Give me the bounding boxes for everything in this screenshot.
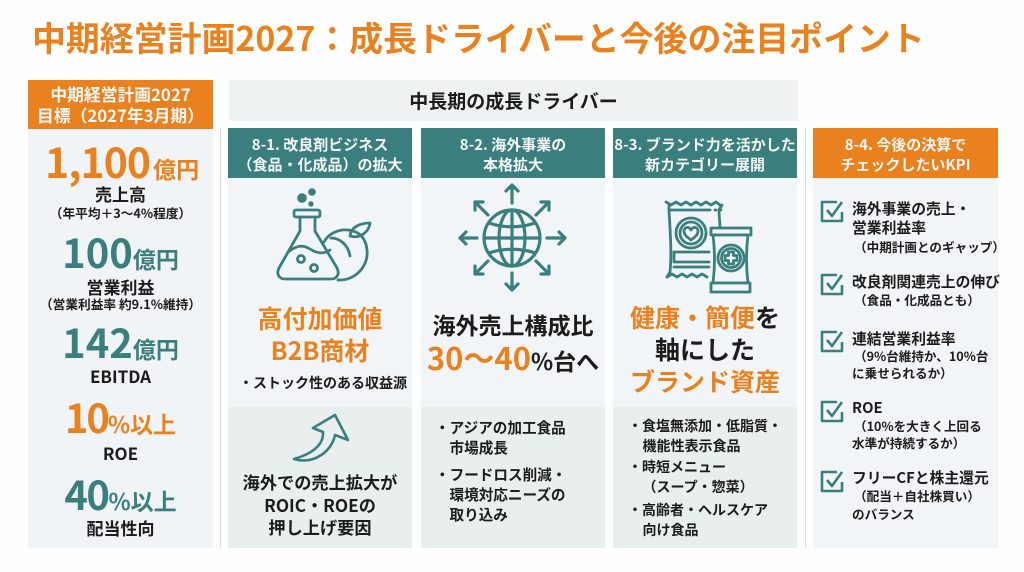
KPI item 1 — [820, 198, 1005, 256]
metric: operating profit — [40, 222, 201, 313]
KPI item 2 — [820, 271, 1000, 309]
panel: 8-2 overseas — [421, 128, 605, 548]
icon: growth arrow — [292, 414, 350, 462]
8-2 bullet 2: 環境対応ニーズの — [450, 484, 566, 505]
8-1 headline: 高付加価値 — [257, 300, 382, 336]
8-1 bullet: ・ストック性のある収益源 — [239, 373, 407, 393]
8-2 headline: 海外売上構成比 — [432, 307, 594, 341]
8-2 header — [421, 128, 605, 178]
8-3 bullet 3: ・高齢者・ヘルスケア — [628, 500, 768, 520]
operating profit value: 100億円 — [62, 222, 179, 280]
icon: checkbox — [820, 274, 844, 296]
KPI text 2: （食品・化成品とも） — [854, 290, 980, 309]
KPI text 4 — [852, 397, 982, 452]
8-4 header — [813, 128, 998, 178]
title: 中期経営計画2027：成長ドライバーと今後の注目ポイント — [32, 12, 925, 61]
metric: sales — [45, 130, 199, 222]
panel: mid-term targets — [28, 80, 213, 548]
8-4 header: チェックしたいKPI — [840, 154, 971, 175]
panel: 8-3 brand — [613, 128, 797, 548]
8-3 header: 新カテゴリー展開 — [645, 154, 765, 175]
8-3 bullet 2: ・時短メニュー — [628, 457, 726, 477]
8-3 bullet 1 — [628, 416, 782, 456]
8-1 headline: B2B商材 — [271, 332, 369, 368]
KPI text 1 — [852, 198, 1005, 256]
8-2 bullet 1 — [435, 417, 566, 458]
KPI item 3 — [820, 328, 988, 382]
KPI text 4: 水準が持続するか） — [852, 433, 965, 452]
8-1 lower box — [228, 407, 412, 548]
KPI text 5: のバランス — [852, 504, 915, 523]
icon: checkbox — [820, 200, 844, 222]
KPI text 1: （中期計画とのギャップ） — [854, 236, 1005, 256]
payout label: 配当性向 — [86, 515, 154, 540]
8-1 header: 8-1. 改良剤ビジネス — [252, 134, 388, 155]
8-1 lower text: ROIC・ROEの — [264, 492, 376, 516]
8-2 bullet 1: 市場成長 — [450, 437, 508, 458]
divider left — [220, 128, 221, 548]
ROE value: 10%以上 — [65, 387, 176, 445]
targets header — [28, 80, 213, 129]
payout value: 40%以上 — [64, 464, 177, 522]
8-2 lower box — [421, 407, 605, 548]
8-3 bullet 2 — [628, 457, 754, 496]
8-3 bullet 3 — [628, 500, 768, 540]
icon: checkbox — [820, 330, 844, 352]
8-1 lower text: 海外での売上拡大が — [243, 469, 397, 494]
KPI item 4 — [820, 397, 982, 452]
KPI text 4: （10%を大きく上回る — [854, 416, 982, 434]
8-1 header: （食品・化成品）の拡大 — [237, 154, 402, 175]
panel: 8-1 improver business — [228, 128, 412, 548]
sales label: 売上高 — [95, 181, 146, 206]
icon: checkbox — [820, 470, 844, 492]
KPI text 2 — [852, 271, 1000, 309]
KPI item 5 — [820, 467, 989, 523]
icon: globe with arrows — [458, 183, 567, 292]
KPI text 3: に乗せられるか） — [852, 362, 953, 382]
8-1 lower text — [243, 469, 397, 539]
8-1 headline — [257, 300, 382, 368]
8-3 bullet 2: （スープ・惣菜） — [642, 476, 754, 496]
8-4 header: 8-4. 今後の決算で — [845, 134, 966, 155]
targets header: 中期経営計画2027 — [50, 82, 191, 106]
KPI text 5: （配当＋自社株買い） — [854, 486, 980, 505]
metric: payout ratio — [64, 464, 177, 540]
icon: food packages — [664, 200, 752, 294]
divider right — [805, 128, 806, 548]
EBITDA value: 142億円 — [62, 312, 179, 370]
KPI text 3 — [852, 328, 988, 382]
8-2 bullet 2: ・フードロス削減・ — [435, 464, 566, 485]
KPI text 4: ROE — [852, 397, 883, 418]
8-2 header: 8-2. 海外事業の — [460, 134, 566, 155]
sales note: （年平均＋3〜4%程度） — [50, 203, 191, 222]
KPI text 3: 連結営業利益率 — [852, 328, 956, 348]
8-3 header: 8-3. ブランド力を活かした — [614, 134, 796, 155]
KPI text 2: 改良剤関連売上の伸び — [852, 271, 1000, 292]
KPI text 3: （9%台維持か、10%台 — [854, 346, 988, 364]
8-3 bullet 3: 向け食品 — [642, 520, 698, 540]
8-3 headline — [630, 299, 780, 399]
8-1 header — [228, 128, 412, 178]
targets header: 目標（2027年3月期） — [37, 103, 204, 127]
banner: growth drivers heading — [229, 80, 798, 121]
8-2 figure: 30〜40%台へ — [427, 334, 599, 379]
8-1 lower text: 押し上げ要因 — [268, 514, 372, 539]
icon: flask and fruit — [276, 188, 372, 282]
8-2 bullet 2: 取り込み — [450, 504, 508, 525]
sales value: 1,100億円 — [45, 130, 199, 190]
8-3 headline: 健康・簡便を — [630, 299, 780, 335]
KPI text 1: 海外事業の売上・ — [852, 198, 970, 218]
8-3 headline: 軸にした — [655, 331, 755, 367]
KPI text 1: 営業利益率 — [852, 216, 926, 238]
KPI text 5: フリーCFと株主還元 — [852, 467, 989, 488]
8-2 bullet 2 — [435, 464, 566, 525]
KPI text 5 — [852, 467, 989, 523]
8-2 header: 本格拡大 — [483, 154, 543, 175]
banner: growth drivers heading: 中長期の成長ドライバー — [409, 87, 618, 114]
8-3 bullet 1: 機能性表示食品 — [642, 436, 740, 456]
metric: EBITDA — [62, 312, 179, 388]
8-2 bullet 1: ・アジアの加工食品 — [435, 417, 566, 438]
8-3 bullet 1: ・食塩無添加・低脂質・ — [628, 416, 782, 436]
operating profit label: 営業利益 — [86, 274, 154, 299]
8-3 headline: ブランド資産 — [630, 363, 780, 399]
operating profit note: （営業利益率 約9.1%維持） — [40, 294, 201, 313]
ROE label: ROE — [103, 440, 138, 465]
icon: checkbox — [820, 400, 844, 422]
panel: 8-4 KPI checklist — [813, 128, 998, 548]
metric: ROE — [65, 387, 176, 465]
EBITDA label: EBITDA — [90, 363, 151, 388]
8-3 header — [613, 128, 797, 178]
8-3 lower box — [613, 407, 797, 548]
